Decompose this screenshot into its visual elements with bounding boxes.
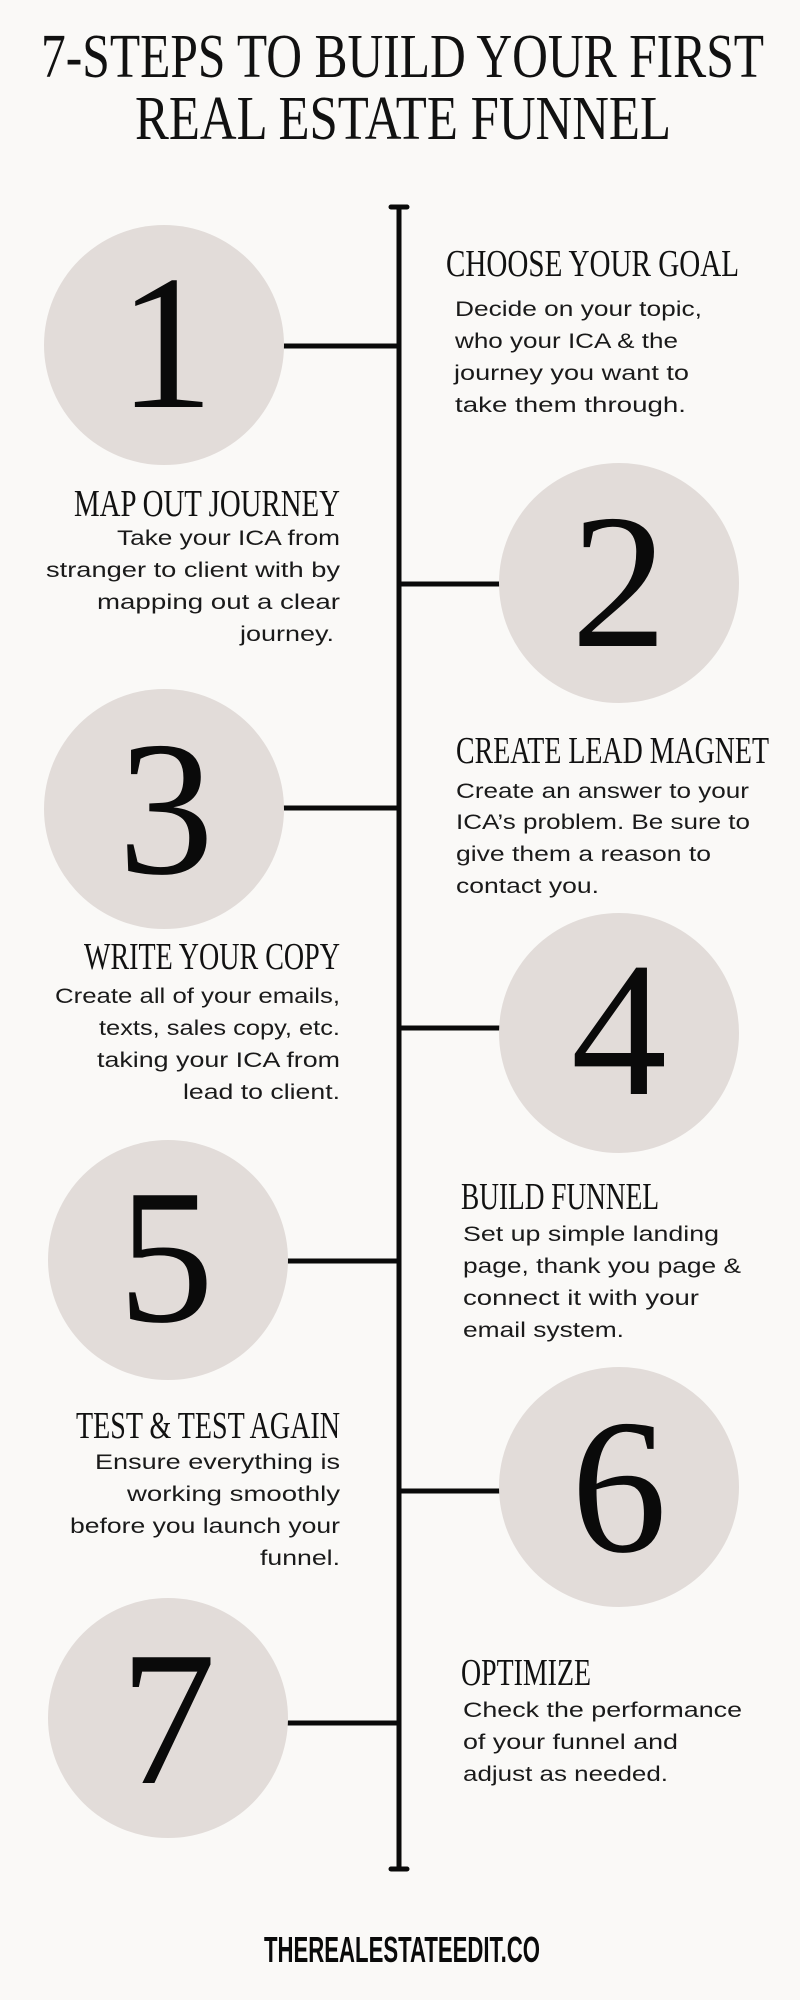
step 4: lead to client. (183, 1081, 340, 1104)
step 2: Take your ICA from (117, 527, 340, 550)
step 2: journey. (239, 623, 334, 646)
step 5: BUILD FUNNEL (461, 1176, 659, 1218)
step 6: before you launch your (70, 1515, 340, 1538)
step 4: Create all of your emails, (55, 985, 340, 1008)
step 2: mapping out a clear (97, 591, 340, 614)
step 2: 2 (571, 475, 667, 688)
step 5: email system. (463, 1319, 624, 1342)
step 5: connect it with your (463, 1287, 699, 1310)
step 6 (70, 1367, 739, 1607)
step 1: Decide on your topic, (455, 298, 702, 321)
timeline line (391, 207, 407, 1869)
step 7: Check the performance (463, 1699, 742, 1722)
step 7: 7 (120, 1612, 216, 1825)
step 4: 4 (571, 923, 667, 1136)
footer: THEREALESTATEEDIT.CO (264, 1929, 540, 1970)
title: REAL ESTATE FUNNEL (135, 85, 671, 153)
step 6: funnel. (260, 1547, 340, 1570)
step 5: page, thank you page & (463, 1255, 741, 1278)
step 6: Ensure everything is (95, 1451, 340, 1474)
step 2 (46, 463, 739, 703)
step 3: contact you. (456, 875, 599, 898)
step 1: take them through. (455, 394, 686, 417)
step 2: MAP OUT JOURNEY (74, 483, 340, 525)
step 4 (55, 913, 739, 1153)
step 5 (48, 1140, 741, 1380)
step 3 (44, 689, 769, 929)
step 3: give them a reason to (456, 843, 711, 866)
step 6: TEST & TEST AGAIN (76, 1405, 340, 1447)
step 7: of your funnel and (463, 1731, 678, 1754)
step 2: stranger to client with by (46, 559, 341, 582)
step 4: texts, sales copy, etc. (99, 1017, 340, 1040)
step 7: OPTIMIZE (461, 1652, 591, 1694)
step 6: 6 (571, 1380, 667, 1593)
step 1: who your ICA & the (454, 330, 678, 353)
step 4: taking your ICA from (97, 1049, 340, 1072)
step 7: adjust as needed. (463, 1763, 668, 1786)
step 4: WRITE YOUR COPY (84, 936, 340, 978)
step 3: Create an answer to your (456, 780, 749, 803)
step 3: 3 (118, 702, 214, 915)
step 1 (44, 225, 739, 465)
title (41, 23, 764, 153)
step 1: 1 (118, 236, 214, 449)
step 1: journey you want to (453, 362, 689, 385)
step 7 (48, 1598, 742, 1838)
step 5: Set up simple landing (463, 1223, 719, 1246)
step 6: working smoothly (126, 1483, 341, 1506)
step 5: 5 (118, 1150, 214, 1363)
step 3: ICA’s problem. Be sure to (456, 811, 750, 834)
